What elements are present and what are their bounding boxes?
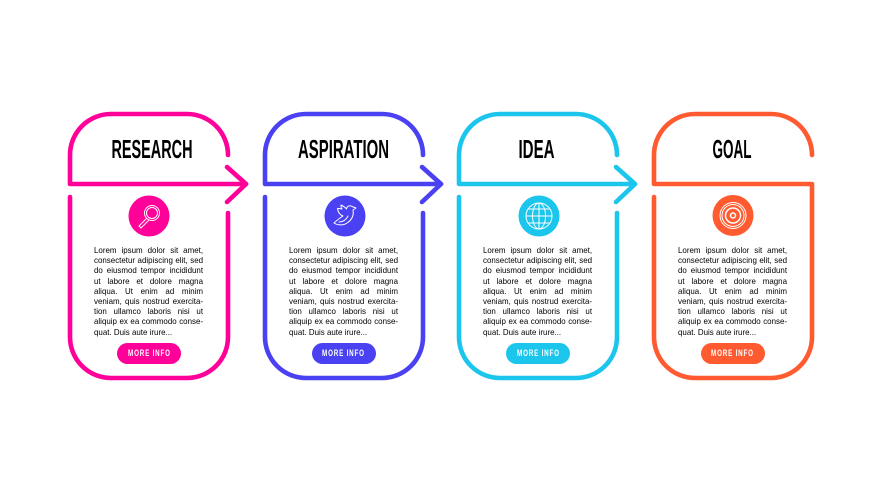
text block: goal: veniam, quis nostrud exercita- [678, 296, 787, 306]
text block: idea: aliqua. Ut enim ad minim [483, 286, 592, 296]
panel: aspiration [262, 112, 444, 380]
text block: research: consectetur adipiscing elit, sed [94, 255, 203, 265]
outline with arrow: aspiration [264, 114, 440, 378]
button: more info: MORE INFO [517, 348, 559, 358]
text block: research: veniam, quis nostrud exercita- [94, 296, 203, 306]
text block: goal [678, 245, 788, 336]
text block: aspiration: quat. Duis aute irure... [288, 326, 367, 336]
text block: research: aliquip ex ea commodo conse- [94, 316, 203, 326]
button: more info [117, 343, 181, 364]
heading: goal: GOAL [712, 134, 751, 164]
text block: goal: ut labore et dolore magna [678, 276, 787, 286]
button: more info [312, 343, 376, 364]
text block: idea: consectetur adipiscing elit, sed [483, 255, 592, 265]
text block: idea: quat. Duis aute irure... [483, 326, 561, 336]
text block: goal: Lorem ipsum dolor sit amet, [678, 245, 787, 255]
text block: idea: veniam, quis nostrud exercita- [483, 296, 592, 306]
outline with arrow: idea [459, 114, 635, 378]
heading: research: RESEARCH [112, 134, 192, 164]
text block: goal: tion ullamco laboris nisi ut [678, 306, 787, 316]
text block: research [94, 245, 204, 336]
text block: aspiration: tion ullamco laboris nisi ut [288, 306, 398, 316]
button: more info: MORE INFO [322, 348, 365, 358]
icon: target [712, 195, 753, 236]
text block: aspiration: aliquip ex ea commodo conse- [288, 316, 398, 326]
outline with arrow: research [70, 114, 246, 378]
text block: goal: do eiusmod tempor incididunt [678, 265, 787, 275]
text block: aspiration: consectetur adipiscing elit, sed [288, 255, 398, 265]
panel: goal [652, 112, 814, 380]
icon: bird [324, 196, 365, 236]
text block: idea [483, 245, 592, 336]
text block: aspiration: aliqua. Ut enim ad minim [288, 286, 398, 296]
text block: idea: tion ullamco laboris nisi ut [483, 306, 592, 316]
text block: research: ut labore et dolore magna [94, 276, 203, 286]
button: more info [506, 343, 570, 364]
text block: research: do eiusmod tempor incididunt [94, 265, 203, 275]
text block: aspiration: veniam, quis nostrud exercita- [288, 296, 398, 306]
text block: research: Lorem ipsum dolor sit amet, [94, 245, 203, 255]
text block: aspiration: do eiusmod tempor incididunt [288, 265, 398, 275]
button: more info [700, 343, 764, 364]
panel: idea [456, 112, 638, 380]
button: more info: MORE INFO [711, 348, 754, 358]
text block: aspiration: Lorem ipsum dolor sit amet, [288, 245, 398, 255]
text block: goal: consectetur adipiscing elit, sed [678, 255, 787, 265]
heading: aspiration: ASPIRATION [298, 134, 388, 164]
icon: globe [518, 196, 560, 236]
button: more info: MORE INFO [128, 348, 170, 358]
outline: goal [654, 114, 812, 378]
text block: aspiration: ut labore et dolore magna [288, 276, 398, 286]
text block: idea: Lorem ipsum dolor sit amet, [483, 245, 592, 255]
icon: magnifier [128, 196, 170, 236]
text block: research: aliqua. Ut enim ad minim [94, 286, 203, 296]
text block: goal: aliquip ex ea commodo conse- [678, 316, 787, 326]
text block: goal: aliqua. Ut enim ad minim [678, 286, 787, 296]
text block: idea: do eiusmod tempor incididunt [483, 265, 592, 275]
text block: idea: aliquip ex ea commodo conse- [483, 316, 592, 326]
text block: aspiration [288, 245, 398, 336]
text block: goal: quat. Duis aute irure... [678, 326, 756, 336]
text block: research: tion ullamco laboris nisi ut [94, 306, 203, 316]
text block: idea: ut labore et dolore magna [483, 276, 592, 286]
heading: idea: IDEA [518, 134, 555, 164]
panel: research [68, 112, 248, 380]
text block: research: quat. Duis aute irure... [94, 326, 172, 336]
